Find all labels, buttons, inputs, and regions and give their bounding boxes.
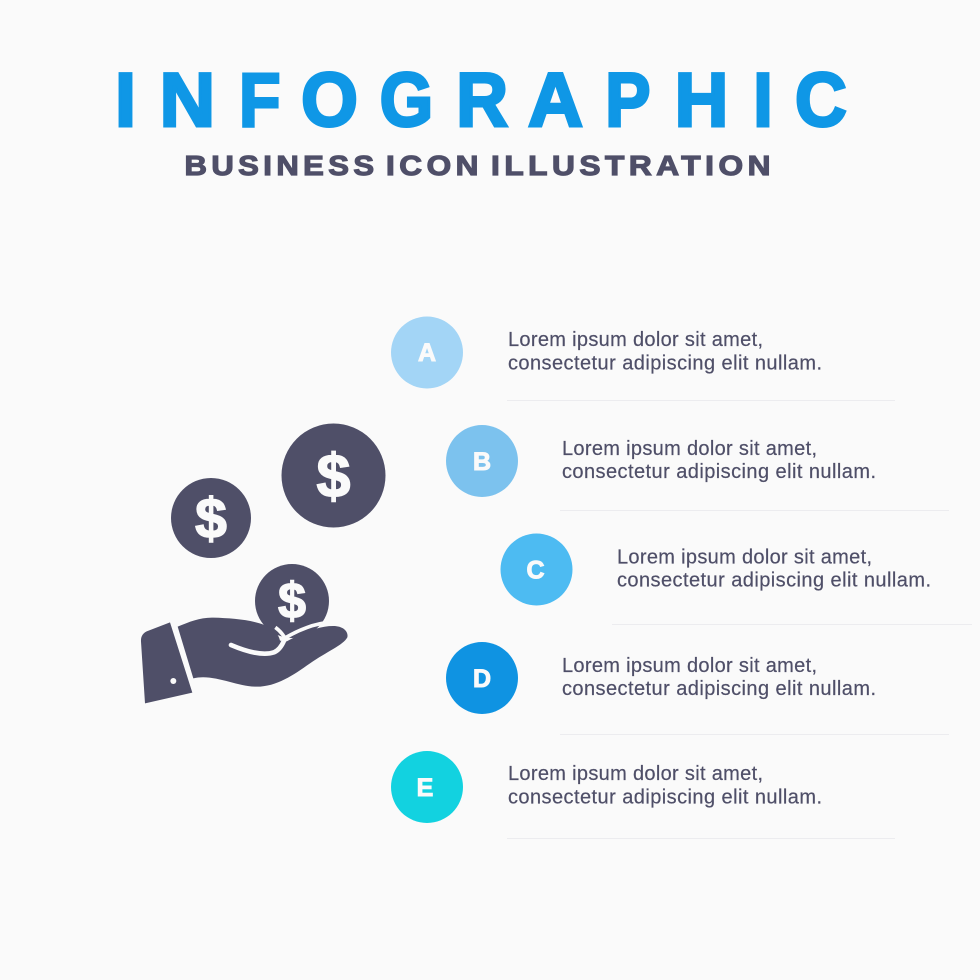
title: C — [795, 58, 847, 143]
text C: Lorem ipsum dolor sit amet, — [617, 546, 872, 568]
badge B — [446, 425, 518, 497]
badge A — [391, 316, 463, 388]
text B: Lorem ipsum dolor sit amet, — [562, 438, 817, 460]
icon: large coin: $ — [317, 442, 351, 510]
step D — [446, 642, 949, 734]
text E: consectetur adipiscing elit nullam. — [508, 786, 822, 808]
icon: small coin on palm: $ — [278, 573, 306, 629]
badge E — [391, 751, 463, 823]
text A: Lorem ipsum dolor sit amet, — [508, 329, 763, 351]
badge C: C — [526, 556, 545, 584]
subtitle: BUSINESS — [184, 150, 378, 181]
icon: hand holding coins — [141, 424, 386, 703]
title: P — [605, 58, 650, 143]
icon: hand — [141, 618, 348, 703]
text E: Lorem ipsum dolor sit amet, — [508, 763, 763, 785]
title: R — [456, 58, 508, 143]
badge A: A — [418, 339, 436, 367]
text B: consectetur adipiscing elit nullam. — [562, 461, 876, 483]
title: I — [115, 58, 136, 143]
title: H — [675, 58, 728, 143]
text C: consectetur adipiscing elit nullam. — [617, 570, 931, 592]
title: I — [753, 58, 773, 143]
title: N — [160, 58, 215, 143]
step A — [391, 316, 895, 400]
text A: consectetur adipiscing elit nullam. — [508, 352, 822, 374]
title: G — [380, 58, 433, 143]
badge D — [446, 642, 518, 714]
badge E: E — [417, 774, 433, 802]
badge B: B — [473, 448, 491, 476]
subtitle: ICON — [386, 150, 483, 181]
text D: consectetur adipiscing elit nullam. — [562, 678, 876, 700]
icon: medium coin: $ — [195, 487, 227, 551]
title: F — [239, 58, 280, 143]
title: O — [301, 58, 358, 143]
step C — [500, 534, 972, 624]
title: A — [528, 58, 583, 143]
icon: small coin on palm — [255, 564, 329, 638]
icon: medium coin — [171, 478, 251, 558]
step E — [391, 751, 895, 838]
badge C — [500, 534, 572, 606]
icon: large coin — [282, 424, 386, 528]
subtitle: ILLUSTRATION — [491, 150, 775, 181]
step B — [446, 425, 949, 510]
badge D: D — [473, 665, 491, 693]
text D: Lorem ipsum dolor sit amet, — [562, 655, 817, 677]
